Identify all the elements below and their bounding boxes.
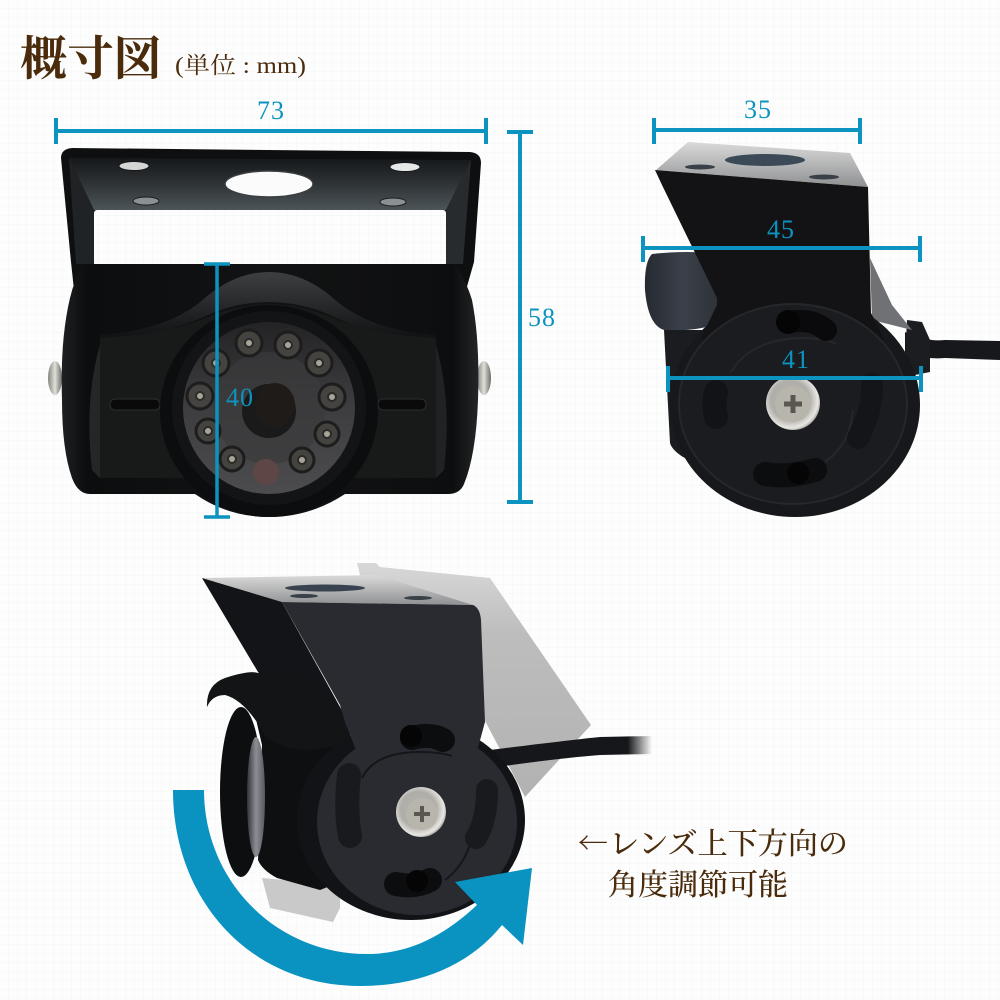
hood [207,672,345,750]
front panel [100,304,436,478]
screw [766,376,820,430]
infrared LEDs [187,330,345,472]
dimension 35: 35 [744,95,772,124]
bracket [61,148,481,290]
rotating plate [679,304,907,504]
holes [400,725,428,892]
ring grooves [362,752,474,880]
caption: 角度調節可能 [608,860,788,904]
dimension 35 [654,95,860,144]
ring grooves [679,304,907,504]
dimension 58: 58 [528,303,556,332]
side bracket [655,170,885,340]
camera body [255,715,345,890]
hood [645,252,720,330]
slots [347,736,487,885]
title: 概寸図 [20,34,161,86]
dimension 73 [56,96,486,144]
cable [905,332,1000,360]
rotating plate [317,729,517,915]
disc outer [297,720,525,920]
rotation arrow [173,790,532,986]
dimension 41 [668,345,921,392]
dimension 40 [204,264,254,517]
dimension 45 [643,215,920,262]
slots [714,321,872,475]
cable [490,736,652,768]
top plate [656,142,868,187]
dimension 73: 73 [257,96,285,125]
unit note: (単位 : mm) [175,53,306,78]
dimension 58 [507,132,556,502]
rear housing [870,258,912,330]
bracket top plate [202,575,473,605]
dimension 40: 40 [226,383,254,412]
lens barrel [247,737,265,857]
front bracket plate [282,602,485,755]
cable grommet [905,320,930,375]
camera body [62,264,478,517]
ghost bracket [357,563,591,797]
caption: ← [578,819,608,863]
side slots [110,399,426,410]
disc outer [670,293,920,517]
lens ring [220,707,262,877]
caption: レンズ上下方向の [609,819,848,863]
hood ridge [100,272,435,342]
holes [776,310,809,484]
front view camera photo [48,148,491,517]
bracket back wall [202,578,350,760]
dimension 41: 41 [782,345,810,374]
light sensor [253,459,279,485]
dimension 45: 45 [767,215,795,244]
rotated camera photo [202,563,652,922]
caption [578,819,848,904]
screw [396,787,446,837]
side bolts [48,361,491,395]
body [664,330,710,470]
title [20,34,306,86]
lens assembly [160,305,378,517]
side view camera photo [645,142,1000,517]
